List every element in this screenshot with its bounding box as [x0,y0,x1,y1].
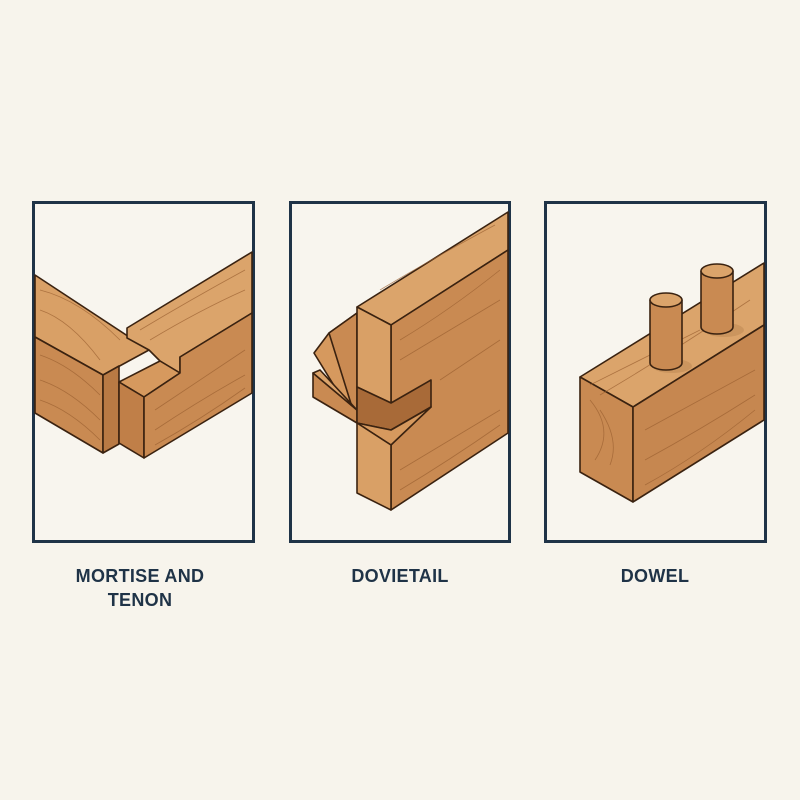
fan pieces [313,313,357,423]
right beam [119,252,252,458]
panel: dowel [546,202,766,542]
dowel 1 [650,293,682,370]
left beam [35,275,149,453]
label: mortise and tenon: TENON [108,590,172,610]
beam [580,263,764,502]
label: dovetail: DOVIETAIL [351,566,449,586]
label: mortise and tenon [76,566,204,610]
label: mortise and tenon: MORTISE AND [76,566,204,586]
label: dowel: DOWEL [621,566,689,586]
panel: dovetail [290,202,510,542]
main board [357,212,508,510]
panel: mortise and tenon [34,202,254,542]
dowel 2 [701,264,733,334]
